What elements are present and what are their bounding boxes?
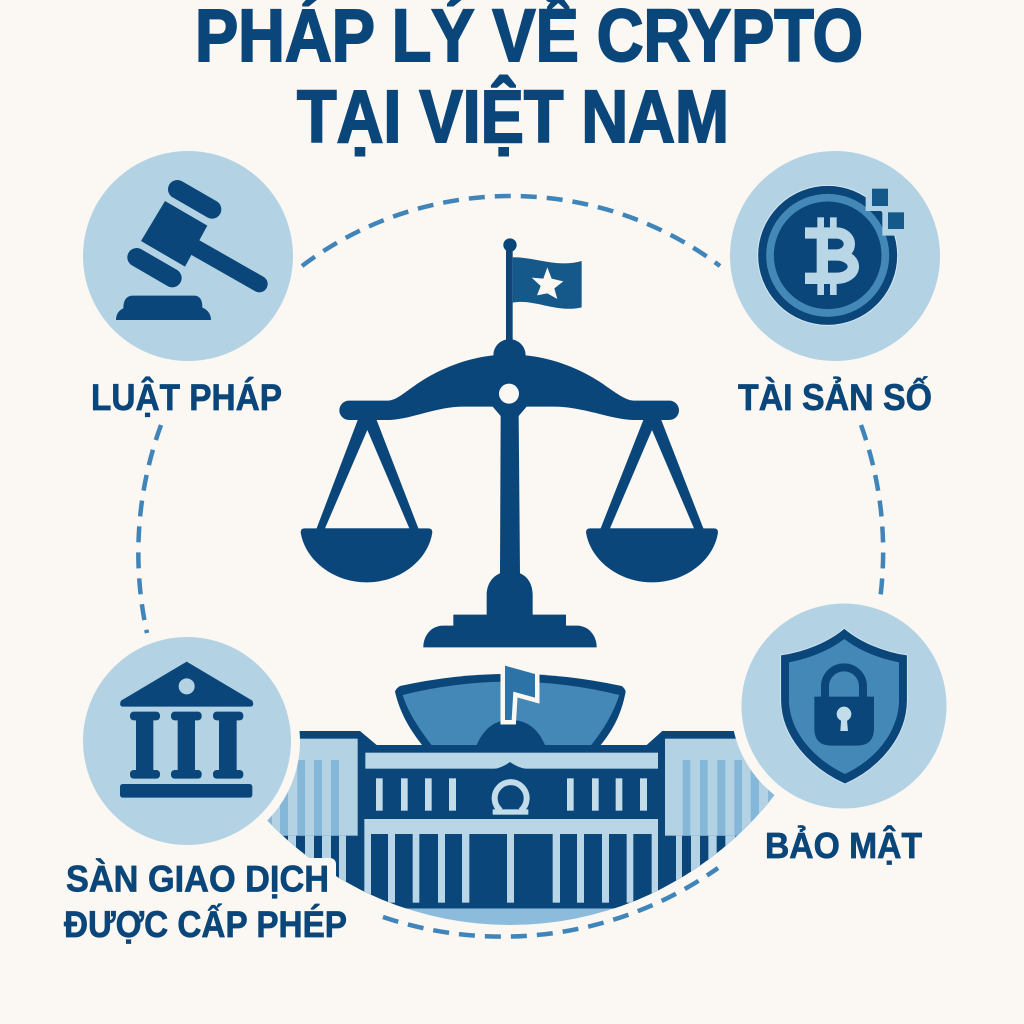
central icon: scales with flag <box>301 238 718 647</box>
icon: shield with padlock <box>781 628 907 784</box>
icon: bank <box>120 662 253 798</box>
panel: security <box>742 604 946 866</box>
title <box>195 0 863 158</box>
beam <box>339 339 679 420</box>
label: digital assets: TÀI SẢN SỐ <box>738 376 932 418</box>
illustration: National Assembly building <box>260 666 780 930</box>
panel: digital assets <box>730 151 940 418</box>
dome bowl <box>395 674 626 747</box>
label: licensed exchanges <box>64 858 347 945</box>
halo around lower circles <box>50 593 957 948</box>
small flag on dome <box>505 666 535 720</box>
icon: gavel <box>116 189 259 320</box>
left pan <box>301 418 432 582</box>
right pan <box>586 418 718 582</box>
panel: licensed exchanges <box>64 637 347 945</box>
label: security: BẢO MẬT <box>765 824 922 866</box>
label: licensed exchanges: ĐƯỢC CẤP PHÉP <box>64 903 347 945</box>
title: TẠI VIỆT NAM <box>297 75 729 158</box>
pillar and base <box>423 415 597 647</box>
wings <box>260 731 780 908</box>
label: licensed exchanges: SÀN GIAO DỊCH <box>66 858 329 900</box>
icon: bitcoin coin <box>758 185 904 325</box>
dashed ring connecting the topics <box>138 196 883 937</box>
flag <box>503 238 582 342</box>
panel: law <box>83 151 293 418</box>
label: law: LUẬT PHÁP <box>91 376 282 418</box>
central facade <box>358 745 665 908</box>
